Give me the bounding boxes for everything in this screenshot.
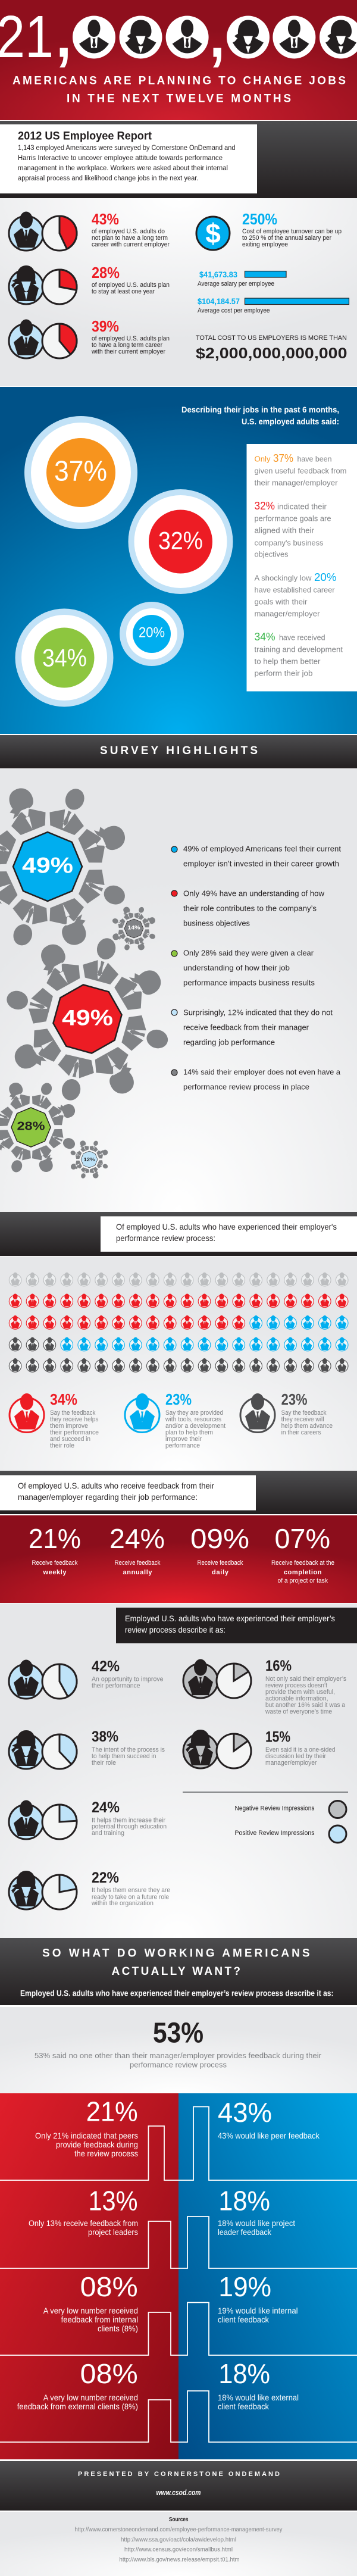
panel: findings text (246, 444, 357, 692)
panel: findings text: 37% (273, 452, 293, 464)
impression: 22%: 22% (92, 1870, 119, 1886)
panel: findings text: to help them better (255, 657, 321, 665)
total cost: TOTAL COST TO US EMPLOYERS IS MORE THAN (196, 334, 347, 342)
impression: 16%: 16% (265, 1658, 292, 1674)
finding: green bullet: Only 28% said they were given a clear (183, 949, 314, 957)
finding: blue bullet: 49% of employed Americans feel their current (183, 844, 341, 854)
stat: annually: 24% (109, 1523, 165, 1554)
stat: 18% project leaders: 18% (218, 2186, 270, 2217)
cluster: green 28% (0, 1079, 79, 1176)
stat: 21% peers: Only 21% indicated that peers (35, 2131, 138, 2140)
stat: 43% (9, 210, 170, 251)
heading: performance review process (0, 1212, 357, 1256)
report description: Harris Interactive to uncover employee attitude towards performance (18, 155, 223, 162)
panel: report intro (0, 121, 357, 198)
panel: sources: http://www.cornerstoneondemand.com/employee-performance-management-survey (75, 2527, 282, 2533)
impression: 38%: to help them succeed in (92, 1753, 156, 1760)
impression: 15%: discussion led by their (265, 1753, 326, 1760)
stat: 23% blue: improve their (165, 1436, 202, 1443)
panel: review process results (0, 1256, 357, 1471)
stat: 23% blue: with tools, resources (165, 1416, 221, 1423)
stat: 43%: not plan to have a long term (92, 235, 168, 242)
legend (234, 1801, 346, 1843)
stat: 21% peers (35, 2096, 138, 2158)
panel: findings text: given useful feedback from (255, 467, 346, 475)
impressions heading: review process describe it as: (125, 1625, 226, 1634)
finding: green bullet: understanding of how their job (183, 963, 290, 973)
stat: 43% peers (218, 2097, 320, 2140)
cluster: red 49% (0, 925, 181, 1113)
stat: completion: of a project or task (277, 1577, 328, 1584)
stat: annually (109, 1523, 165, 1576)
stat: 250% turnover cost: $ (205, 218, 221, 249)
panel: findings text: perform their job (255, 669, 313, 677)
stat: weekly (29, 1523, 81, 1576)
stat: 23% dark: 23% (281, 1390, 308, 1408)
stat: 19% internal clients (218, 2271, 298, 2324)
impression: 15%: 15% (265, 1728, 290, 1745)
stat: 08% internal clients: feedback from internal (61, 2315, 138, 2324)
panel: 53% callout: 53% said no one other than their manager/employer provides feedback during their (35, 2051, 322, 2060)
panel: sources: http://www.ssa.gov/oact/cola/awidevelop.html (121, 2537, 236, 2543)
impression: 42% (9, 1658, 163, 1699)
impression: 24% (9, 1799, 167, 1839)
stat: 13% project leaders (29, 2186, 138, 2237)
stat: daily (190, 1523, 249, 1576)
impression: 22%: ready to take on a future role (92, 1894, 169, 1901)
panel: findings text: have established career (255, 586, 335, 594)
report description: management in the workplace. Workers were asked about their internal (18, 165, 228, 172)
panel: header (0, 0, 357, 120)
stat: 43% peers: 43% (218, 2097, 272, 2128)
impression: 24%: potential through education (92, 1823, 167, 1830)
stat: 28%: 28% (92, 264, 120, 282)
stat: 13% project leaders: 13% (88, 2186, 138, 2217)
finding: gray bullet (171, 1068, 341, 1092)
stat: 23% blue: and/or a development (165, 1423, 226, 1430)
impression: 42%: their performance (92, 1682, 140, 1689)
stat: completion (271, 1523, 334, 1584)
cluster: blue 49% (0, 782, 131, 951)
stat: 34% red: and succeed in (50, 1436, 90, 1443)
report description: appraisal process and likelihood change jobs in the next year. (18, 175, 199, 182)
report heading: 2012 US Employee Report (18, 130, 152, 143)
stat: 28%: to stay at least one year (92, 288, 155, 295)
panel: sources (0, 2512, 357, 2576)
impression: 15%: Even said it is a one-sided (265, 1746, 336, 1753)
finding: light blue bullet: Surprisingly, 12% indicated that they do not (183, 1008, 333, 1017)
finding: red bullet: Only 49% have an understanding of how (183, 889, 325, 898)
panel: findings text: have been (298, 455, 332, 463)
finding: light blue bullet (171, 1008, 333, 1046)
impression: 16%: actionable information, (265, 1695, 328, 1702)
panel: survey highlights (0, 769, 357, 1212)
panel: employment statistics (0, 198, 357, 386)
heading: what do working Americans want: SO WHAT DO WORKING AMERICANS (42, 1947, 309, 1959)
panel: findings text: objectives (255, 550, 289, 558)
panel: findings text: training and development (255, 645, 343, 654)
panel: findings text: indicated their (277, 502, 327, 511)
panel: 53% callout: 53% (153, 2018, 203, 2049)
impression: 22%: It helps them ensure they are (92, 1887, 170, 1894)
cluster: light blue 12%: 12% (83, 1156, 95, 1162)
finding: gray bullet: 14% said their employer does not even have a (183, 1068, 341, 1076)
heading: what do working Americans want (0, 1938, 357, 2005)
stat: 18% project leaders (218, 2186, 295, 2237)
finding: red bullet: business objectives (183, 919, 250, 927)
heading: feedback frequency (0, 1471, 357, 1514)
stat: 13% project leaders: Only 13% receive feedback from (29, 2218, 138, 2228)
heading: performance review process: Of employed U.S. adults who have experienced their employer's (116, 1222, 337, 1231)
panel: findings text: 32% (255, 500, 275, 512)
stat: 34% red: Say the feedback (50, 1409, 96, 1417)
finding: green bullet (171, 949, 315, 987)
stat: 23% blue: plan to help them (165, 1429, 213, 1436)
bar: average salary: Average salary per employee (198, 280, 274, 287)
impression: 24%: 24% (92, 1799, 120, 1816)
stat: 18% external clients: 18% would like external (218, 2393, 299, 2402)
finding: blue bullet (171, 844, 341, 868)
stat: 250% turnover cost: to 250 % of the annual salary per (242, 235, 331, 242)
stat: 18% project leaders: 18% would like project (218, 2218, 295, 2228)
section intro (181, 405, 339, 426)
stat: 08% external clients: A very low number received (43, 2393, 138, 2402)
stat: 23% blue: Say they are provided (165, 1409, 223, 1417)
impression: 24%: It helps them increase their (92, 1817, 165, 1824)
panel: findings text: 20% (314, 571, 337, 583)
panel: findings text: have received (279, 633, 325, 642)
stat: 19% internal clients: 19% would like internal (218, 2306, 298, 2315)
finding: light blue bullet: regarding job performance (183, 1038, 275, 1046)
stat: 23% blue (125, 1390, 226, 1449)
stat: 43% peers: 43% would like peer feedback (218, 2131, 320, 2140)
stat: 39%: with their current employer (91, 348, 165, 355)
subtitle: IN THE NEXT TWELVE MONTHS (67, 93, 291, 105)
stat: 08% external clients: 08% (80, 2358, 138, 2389)
footer: presented by (0, 2461, 357, 2511)
panel: feedback received (0, 2093, 178, 2459)
panel: sources: Sources (169, 2516, 189, 2523)
stat: completion: 07% (275, 1523, 330, 1554)
panel: findings text: goals with their (255, 598, 308, 606)
finding: gray bullet: performance review process in place (183, 1082, 309, 1092)
legend: Negative Review Impressions (234, 1805, 315, 1812)
stat: 18% external clients: client feedback (218, 2402, 270, 2411)
stat: 43%: of employed U.S. adults do (92, 228, 165, 235)
stat: 08% external clients (17, 2358, 138, 2411)
impression: 16%: provide them with useful, (265, 1689, 335, 1696)
legend: Positive Review Impressions (234, 1830, 315, 1837)
stat: 19% internal clients: 19% (218, 2271, 271, 2302)
bar: average cost: $104,184.57 (198, 296, 240, 306)
panel: findings text: manager/employer (255, 609, 320, 618)
stat: 250% turnover cost: exiting employee (242, 241, 288, 248)
panel: findings text: aligned with their (255, 526, 315, 534)
stat: 23% blue: performance (165, 1442, 200, 1449)
stat: 34% red (10, 1390, 99, 1449)
panel: feedback wanted (178, 2093, 357, 2459)
panel: findings text: A shockingly low (255, 574, 312, 582)
bubble: 37% (24, 416, 137, 529)
impression: 22%: within the organization (91, 1900, 154, 1907)
stat: 08% internal clients: A very low number received (43, 2306, 138, 2315)
report description: 1,143 employed Americans were surveyed by Cornerstone OnDemand and (18, 145, 236, 152)
total cost (196, 334, 347, 362)
panel: findings text: performance goals are (255, 514, 331, 523)
heading: what do working Americans want: ACTUALLY WANT? (112, 1965, 240, 1978)
panel: job descriptions (0, 387, 357, 734)
stat: weekly: Receive feedback (32, 1559, 78, 1567)
panel: sources: http://www.census.gov/econ/smallbus.html (124, 2546, 233, 2553)
stat: 08% internal clients: 08% (80, 2271, 138, 2302)
bar: average cost: Average cost per employee (198, 307, 270, 314)
stat: annually: Receive feedback (114, 1559, 161, 1567)
bar: average salary: $41,673.83 (199, 270, 237, 279)
impression: 42%: An opportunity to improve (92, 1676, 163, 1683)
stat: 250% turnover cost: Cost of employee turnover can be up (242, 228, 342, 235)
cluster: light blue 12% (69, 1139, 109, 1180)
cluster: green 28%: 28% (17, 1120, 45, 1133)
panel: findings text: Only (255, 455, 271, 463)
impression: 42%: 42% (92, 1658, 120, 1675)
stat: 19% internal clients: client feedback (218, 2315, 270, 2324)
footer: presented by: www.csod.com (156, 2488, 201, 2497)
stat: 13% project leaders: project leaders (88, 2227, 138, 2237)
impression: 38% (9, 1728, 165, 1769)
impression: 16%: Not only said their employer’s (265, 1675, 346, 1683)
subtitle (12, 75, 346, 105)
impression: 16%: but another 16% said it was a (265, 1702, 346, 1709)
bar: average cost (198, 296, 349, 314)
finding: red bullet: their role contributes to the company’s (183, 904, 317, 913)
heading: feedback frequency: manager/employer regarding their job performance: (18, 1492, 198, 1502)
heading: performance review process: performance review process: (116, 1233, 215, 1243)
stat: 21% peers: provide feedback during (56, 2140, 138, 2149)
panel: 53% callout: performance review process (130, 2061, 227, 2069)
stat: 18% external clients (218, 2358, 299, 2411)
panel: review impressions (0, 1603, 357, 1938)
stat: annually: annually (123, 1569, 152, 1576)
heading: feedback frequency: Of employed U.S. adults who receive feedback from their (18, 1481, 214, 1490)
bubble: 32% (129, 489, 233, 594)
subtitle: AMERICANS ARE PLANNING TO CHANGE JOBS (12, 75, 346, 87)
cluster: gray 14% (111, 905, 157, 952)
heading: survey highlights: SURVEY HIGHLIGHTS (100, 745, 258, 757)
bubble: 20%: 20% (139, 625, 165, 640)
stat: 34% red: their role (50, 1442, 74, 1449)
stat: 18% project leaders: leader feedback (218, 2227, 272, 2237)
cluster: gray 14%: 14% (127, 925, 140, 931)
panel: feedback frequency (0, 1515, 357, 1603)
stat: weekly: 21% (29, 1523, 81, 1554)
stat: 250% turnover cost: 250% (242, 210, 277, 228)
impression: 15% (183, 1728, 336, 1768)
impression: 16% (183, 1658, 346, 1715)
stat: 250% turnover cost (196, 210, 342, 250)
stat: 39%: 39% (92, 317, 119, 335)
stat: completion: completion (284, 1569, 322, 1576)
stat: 34% red: they receive helps (50, 1416, 99, 1423)
bubble: 34% (15, 608, 113, 707)
stat: daily: Receive feedback (198, 1559, 243, 1567)
stat: 43%: career with current employer (92, 241, 170, 248)
stat: 23% dark: help them advance (281, 1423, 333, 1430)
stat: 08% internal clients: clients (8%) (98, 2324, 138, 2333)
stat: completion: Receive feedback at the (271, 1559, 334, 1567)
heading: survey highlights (0, 735, 357, 768)
impression: 16%: review process doesn’t (265, 1682, 327, 1689)
stat: 28% (9, 264, 170, 304)
stat: daily: 09% (190, 1523, 249, 1554)
finding: light blue bullet: receive feedback from their manager (183, 1023, 309, 1032)
impression: 15%: manager/employer (265, 1759, 317, 1767)
bubble: 32%: 32% (158, 526, 203, 555)
panel: findings text: their manager/employer (255, 479, 338, 487)
total cost: $2,000,000,000,000 (196, 345, 347, 362)
cluster: blue 49%: 49% (22, 854, 73, 877)
impressions heading: Employed U.S. adults who have experienced their employer’s (125, 1614, 335, 1623)
finding: red bullet (171, 889, 325, 927)
panel: findings text: company's business (255, 538, 324, 548)
stat: 34% red: their performance (50, 1429, 99, 1436)
finding: blue bullet: employer isn’t invested in their career growth (183, 859, 339, 868)
bubble: 20% (120, 602, 184, 666)
stat: 39% (9, 317, 170, 358)
stat: 28%: of employed U.S. adults plan (92, 282, 170, 289)
stat: 23% dark (240, 1390, 333, 1436)
headline number: 21,000,000 (0, 0, 357, 75)
impression: 38%: The intent of the process is (92, 1746, 165, 1753)
stat: 23% blue: 23% (165, 1390, 192, 1408)
stat: 39%: of employed U.S. adults plan (92, 335, 170, 342)
bubble: 34%: 34% (42, 644, 87, 671)
impressions heading (116, 1608, 357, 1643)
stat: 08% external clients: feedback from external clients (8%) (17, 2402, 138, 2411)
stat: 21% peers: the review process (74, 2149, 138, 2158)
bubble: 37%: 37% (54, 456, 107, 487)
impression: 22% (9, 1870, 170, 1909)
stat: 23% dark: Say the feedback (281, 1409, 327, 1417)
people grid (9, 1273, 348, 1372)
stat: 23% dark: in their careers (281, 1429, 321, 1436)
stat: 18% external clients: 18% (218, 2358, 270, 2389)
impression: 24%: and training (92, 1830, 124, 1837)
stat: 34% red: 34% (50, 1390, 77, 1408)
chart: step bar outlines (0, 2107, 357, 2442)
finding: green bullet: performance impacts business results (183, 978, 315, 987)
footer: presented by: PRESENTED BY CORNERSTONE ONDEMAND (78, 2471, 280, 2478)
section intro: Describing their jobs in the past 6 months, (181, 405, 339, 414)
panel: 53% callout (0, 2007, 357, 2093)
stat: 08% internal clients (43, 2271, 138, 2333)
stat: 43%: 43% (92, 210, 119, 228)
impression: 38%: 38% (92, 1728, 118, 1745)
panel: sources: http://www.bls.gov/news.release/empsit.t01.htm (119, 2557, 239, 2563)
stat: 34% red: them improve (50, 1423, 88, 1430)
stat: 21% peers: 21% (86, 2096, 138, 2127)
stat: daily: daily (212, 1569, 229, 1576)
stat: weekly: weekly (43, 1569, 67, 1576)
report description (18, 145, 236, 182)
stat: 23% dark: they receive will (281, 1416, 324, 1423)
cluster: red 49%: 49% (62, 1006, 113, 1030)
panel: findings text: 34% (255, 631, 275, 643)
section intro: U.S. employed adults said: (242, 417, 339, 426)
impression: 16%: waste of everyone’s time (265, 1708, 332, 1715)
bar: average salary (198, 270, 286, 287)
impression: 38%: their role (92, 1759, 116, 1767)
stat: 39%: to have a long term career (92, 342, 162, 349)
